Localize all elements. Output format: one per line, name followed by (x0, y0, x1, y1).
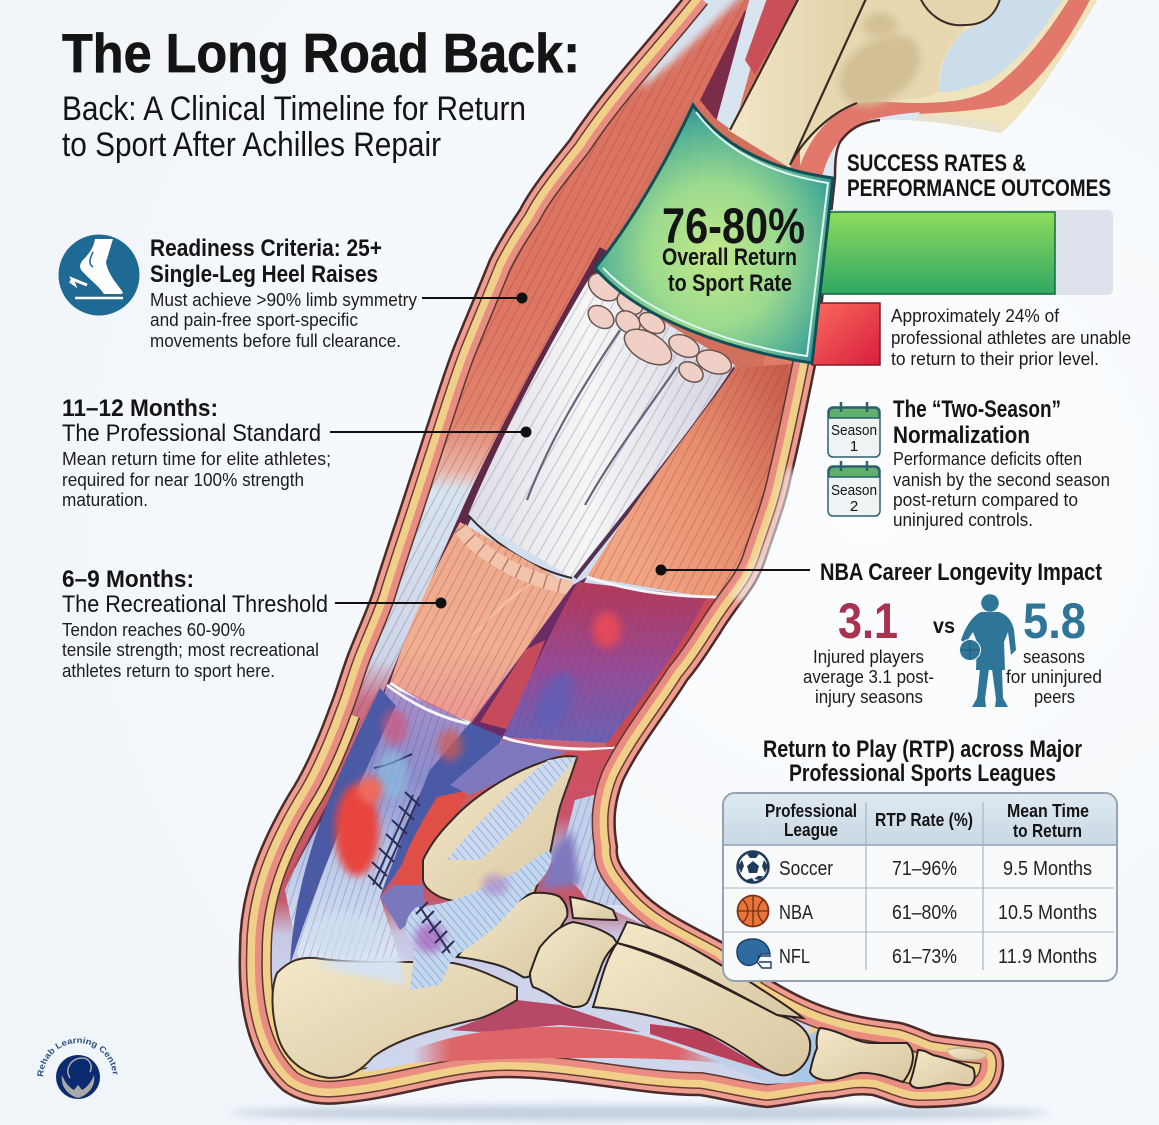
text block: recreational threshold: Tendon reaches 60-90% (62, 620, 245, 640)
text block: recreational threshold (62, 566, 328, 681)
callout: return to sport rate: 76-80% (662, 198, 805, 254)
logo: Rehab Learning Center (37, 1037, 118, 1099)
callout: return to sport rate (595, 105, 833, 363)
text block: unable to return: to return to their prior level. (891, 349, 1099, 369)
table: return to play by league: 9.5 Months (1003, 858, 1092, 880)
table: return to play by league: Professional (765, 801, 857, 821)
bar chart: success rate (812, 210, 1113, 365)
table: return to play by league: 71–96% (892, 858, 957, 880)
table: return to play by league: League (784, 820, 838, 840)
sole tissue under foot (362, 1000, 818, 1084)
text block: readiness criteria (150, 235, 417, 351)
stat: uninjured peers: peers (1034, 687, 1075, 707)
label: vs: vs (933, 615, 955, 638)
left inner bands near knee (640, 0, 803, 132)
muscle: deep wedge near ankle (380, 723, 565, 930)
right side of ankle (538, 748, 646, 926)
dark separation band along calf (300, 250, 605, 870)
tendon bundle caps (587, 272, 732, 383)
text block: readiness criteria: and pain-free sport-specific (150, 310, 358, 330)
text block: readiness criteria: Must achieve >90% limb symmetry (150, 290, 417, 310)
icon: soccer ball (738, 852, 768, 882)
text block: recreational threshold: athletes return to sport here. (62, 661, 275, 681)
text block: two-season normalization: The “Two-Season” (893, 396, 1061, 423)
text block: readiness criteria: Single-Leg Heel Raises (150, 261, 378, 288)
text block: professional standard: maturation. (62, 490, 148, 510)
text block: two-season normalization (893, 396, 1110, 530)
bone: talus and tibia tip (423, 756, 577, 904)
tendon: calcaneal insertion band (310, 757, 577, 990)
pointer: recreational threshold (335, 598, 446, 608)
icon: season calendars: 2 (850, 498, 858, 515)
table: return to play by league: Mean Time (1007, 801, 1089, 821)
stat: injured players: 3.1 (838, 593, 898, 649)
stat: injured players (803, 593, 934, 707)
knee: bone and soft tissue (728, 0, 1097, 177)
table: return to play by league: NFL (779, 946, 810, 968)
table: return to play by league: NBA (779, 902, 814, 924)
icon: foot readiness badge (58, 234, 140, 316)
heading: success rates (847, 150, 1111, 202)
table: return to play by league: 11.9 Months (998, 946, 1097, 968)
heading: RTP table: Professional Sports Leagues (789, 760, 1056, 787)
table: return to play by league: to Return (1013, 821, 1082, 841)
stat: uninjured peers: seasons (1023, 647, 1085, 667)
icon: basketball (738, 896, 768, 926)
subtitle (62, 90, 526, 164)
text block: two-season normalization: post-return compared to (893, 490, 1078, 510)
heading: RTP table: Return to Play (RTP) across Major (763, 736, 1082, 763)
text block: readiness criteria: movements before full clearance. (150, 331, 401, 351)
title: The Long Road Back: (62, 22, 580, 84)
text block: professional standard: The Professional Standard (62, 420, 321, 447)
subtitle: to Sport After Achilles Repair (62, 126, 441, 164)
subtitle: Back: A Clinical Timeline for Return (62, 90, 526, 128)
tendon: blue repaired section (285, 685, 470, 965)
heading: NBA longevity: NBA Career Longevity Impact (820, 559, 1102, 586)
heading: RTP table (763, 736, 1082, 787)
stat: injured players: injury seasons (815, 687, 923, 707)
illustration: lower leg and foot anatomy (230, 0, 1159, 1120)
text block: unable to return: Approximately 24% of (891, 306, 1060, 326)
pointer: longevity (656, 566, 810, 574)
bone: calcaneus heel (272, 958, 517, 1078)
surgical sutures (368, 792, 454, 953)
logo: Rehab Learning Center: Rehab Learning Center (37, 1037, 118, 1076)
icon: season calendars: Season (831, 482, 877, 499)
text block: professional standard: required for near 100% strength (62, 470, 304, 490)
text block: recreational threshold: The Recreational Threshold (62, 591, 328, 618)
pointer: readiness (422, 294, 526, 302)
icon: season calendars: Season (831, 422, 877, 439)
heading: success rates: SUCCESS RATES & (847, 150, 1026, 177)
text block: two-season normalization: Performance deficits often (893, 449, 1082, 469)
text block: unable to return (891, 306, 1131, 369)
icon: season calendars (828, 402, 880, 516)
text block: professional standard: Mean return time for elite athletes; (62, 449, 331, 469)
text block: two-season normalization: vanish by the second season (893, 470, 1110, 490)
pointer: professional standard (330, 428, 530, 436)
table: return to play by league: 61–80% (892, 902, 957, 924)
table: return to play by league (723, 793, 1117, 981)
stat: injured players: Injured players (813, 647, 924, 667)
text block: readiness criteria: Readiness Criteria: 25+ (150, 235, 382, 262)
text block: two-season normalization: Normalization (893, 422, 1030, 449)
icon: season calendars: 1 (850, 438, 858, 455)
table: return to play by league: 61–73% (892, 946, 957, 968)
muscle: purple injured section (503, 577, 723, 749)
muscle: red band right of purple (605, 594, 718, 747)
icon: basketball player (960, 594, 1016, 707)
muscle: right calf (587, 364, 792, 596)
stat: uninjured peers: for uninjured (1006, 667, 1102, 687)
callout: return to sport rate: to Sport Rate (668, 270, 792, 297)
icon: football helmet (737, 939, 771, 968)
fatty tissue and skin layers (240, 0, 1003, 1107)
bones: tarsals, metatarsals and toes (457, 893, 987, 1088)
stat: injured players: average 3.1 post- (803, 667, 934, 687)
stat: uninjured peers: 5.8 (1023, 593, 1086, 649)
muscle: orange repair section (390, 522, 573, 723)
muscle: upper calf behind shield (607, 100, 776, 368)
tendon: white central bundle (468, 277, 735, 578)
text block: recreational threshold: tensile strength; most recreational (62, 640, 319, 660)
text block: recreational threshold: 6–9 Months: (62, 566, 194, 593)
text block: professional standard: 11–12 Months: (62, 395, 218, 422)
callout: return to sport rate: Overall Return (662, 244, 797, 271)
stat: uninjured peers (1006, 593, 1102, 707)
text block: professional standard (62, 395, 331, 510)
gap wedge between sections (470, 577, 587, 740)
table: return to play by league: 10.5 Months (998, 902, 1097, 924)
table: return to play by league: Soccer (779, 858, 833, 880)
text block: unable to return: professional athletes are unable (891, 328, 1131, 348)
text block: two-season normalization: uninjured controls. (893, 510, 1033, 530)
table: return to play by league: RTP Rate (%) (875, 810, 973, 830)
